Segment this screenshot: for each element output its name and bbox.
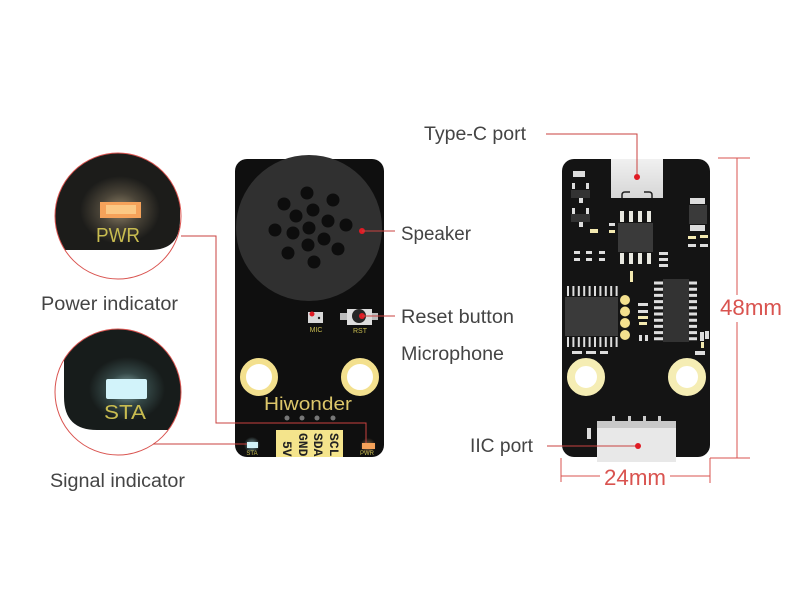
- 8-pin chip: [618, 211, 653, 264]
- back PCB: [562, 159, 710, 457]
- leader: reset: [359, 313, 395, 319]
- PWR LED small: PWR: [360, 451, 375, 457]
- label: signal indicator: Signal indicator: [50, 471, 186, 492]
- panel: power indicator zoom: [54, 152, 182, 280]
- signal circle outline: [55, 329, 181, 455]
- STA label: STA: [104, 402, 147, 424]
- leader line: signal indicator: [153, 443, 247, 445]
- label: reset button: Reset button: [401, 307, 514, 328]
- reset button component: RST: [353, 328, 368, 335]
- STA LED small: [244, 437, 260, 457]
- pin label block: [276, 430, 343, 457]
- pin label block: SDA: [310, 433, 325, 457]
- power LED: [100, 202, 141, 218]
- leader: IIC: [547, 443, 641, 449]
- mounting hole left: [243, 361, 275, 393]
- mic marker dot: [310, 312, 314, 316]
- power circle outline: [55, 153, 181, 279]
- gold test pads: [620, 295, 630, 340]
- speaker holes: [268, 186, 352, 268]
- reset button component: [340, 309, 378, 335]
- signal LED glow: [92, 360, 162, 418]
- dimension: width: [561, 458, 710, 490]
- small chip top right: [689, 198, 707, 231]
- label: speaker: Speaker: [401, 224, 472, 245]
- label: Type-C port: Type-C port: [424, 124, 527, 145]
- speaker body: [236, 155, 382, 301]
- panel: signal indicator zoom: [54, 328, 182, 456]
- large left chip: [565, 286, 618, 347]
- STA LED small: STA: [246, 451, 258, 457]
- leader: speaker: [359, 228, 395, 234]
- label: power indicator: Power indicator: [41, 294, 179, 315]
- power LED highlight: [106, 205, 136, 214]
- dimension: height: [710, 158, 782, 458]
- microphone component: MIC: [310, 327, 322, 334]
- panel: front of board: [235, 155, 384, 457]
- front PCB: [235, 159, 384, 457]
- leader line: power indicator: [181, 236, 366, 443]
- label: microphone: Microphone: [401, 344, 504, 365]
- microphone component: [308, 312, 323, 334]
- leader: Type-C: [546, 134, 640, 180]
- IIC connector: [597, 416, 676, 462]
- label: IIC port: IIC port: [470, 436, 534, 457]
- mounting hole right: [344, 361, 376, 393]
- power LED glow: [84, 179, 156, 241]
- mounting hole right: [672, 362, 702, 392]
- signal LED: [106, 379, 147, 399]
- panel: back of board: [562, 159, 710, 462]
- header pads: [284, 416, 336, 420]
- pin label block: GND: [295, 433, 310, 457]
- mounting hole left: [571, 362, 601, 392]
- brand logo: Hiwonder: [264, 394, 352, 414]
- power zoom black board: [56, 154, 180, 250]
- PWR LED small: [360, 438, 376, 457]
- pin label block: SCL: [326, 433, 341, 457]
- small SMD components: [571, 171, 709, 439]
- pin label block: 5V: [279, 441, 294, 457]
- signal zoom black board: [64, 330, 180, 430]
- dimension: width: 24mm: [604, 465, 666, 490]
- dimension: height: 48mm: [720, 295, 782, 320]
- PWR label: PWR: [96, 225, 140, 247]
- Type-C connector: [611, 159, 663, 198]
- right IC: [654, 279, 697, 342]
